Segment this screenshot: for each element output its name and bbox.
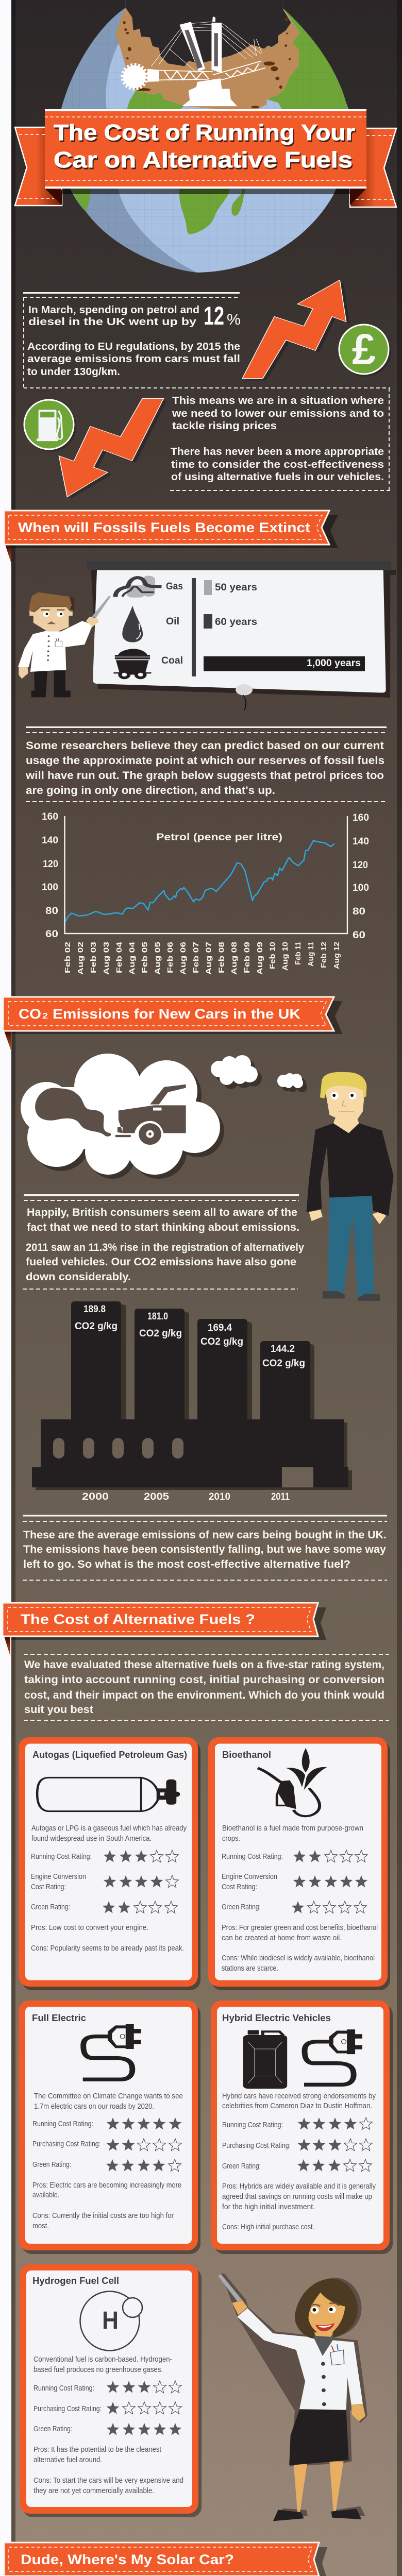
x axis date labels: Feb 03 xyxy=(89,942,98,973)
description: celebrities from Cameron Diaz to Dustin Hoffman. xyxy=(222,2102,372,2110)
year labels: 2011 xyxy=(271,1492,290,1502)
description: The Committee on Climate Change wants to see xyxy=(34,2092,183,2100)
icon: jerry can xyxy=(243,2030,287,2089)
text: British consumers: down considerably. xyxy=(26,1271,131,1283)
pros and cons: agreed that savings on running costs will make up xyxy=(222,2193,372,2201)
bar: gas 50 years: 50 years xyxy=(215,582,257,593)
icon: plug xyxy=(304,2029,362,2084)
pros and cons: alternative fuel around. xyxy=(34,2456,102,2464)
bar labels: gas, oil, coal xyxy=(161,581,183,666)
rating: green 4 of 5 xyxy=(32,2159,181,2172)
pros and cons: Pros: It has the potential to be the cleanest xyxy=(34,2446,161,2454)
value: 2000 xyxy=(75,1304,118,1332)
icon: gas pipes xyxy=(115,575,161,598)
pros and cons: Cons: To start the cars will be very expensive and xyxy=(34,2477,183,2485)
section banner: solar car: Dude, Where's My Solar Car? xyxy=(21,2552,234,2567)
year labels: 2005 xyxy=(144,1492,169,1502)
icon: car exhaust xyxy=(35,1084,186,1145)
text: five-star rating intro: suit you best xyxy=(24,1704,93,1716)
left axis labels: 120 xyxy=(43,859,58,870)
rating: running cost 4 of 5 xyxy=(222,2117,372,2130)
text: five-star rating intro xyxy=(24,1659,384,1716)
x axis date labels: Aug 11 xyxy=(307,942,315,967)
title: The Cost of Running Your xyxy=(54,120,355,145)
text: researchers predict xyxy=(25,740,384,796)
rating: running cost 3 of 5: Running Cost Rating: xyxy=(31,1853,92,1861)
pros and cons: stations are scarce. xyxy=(222,1964,278,1973)
intro text: spending up 12%: diesel in the UK went up by xyxy=(28,316,197,328)
panel: bioethanol card xyxy=(208,1737,390,1990)
text: five-star rating intro: taking into account running cost, initial purchasing or conversion xyxy=(24,1674,384,1686)
right axis labels: 140 xyxy=(353,836,369,847)
value: 2010: 169.4 xyxy=(208,1323,232,1333)
character: male scientist with pointer xyxy=(18,592,111,697)
left axis labels: 100 xyxy=(42,882,58,893)
value: 2005: CO2 g/kg xyxy=(139,1328,182,1339)
card title: Hybrid Electric Vehicles xyxy=(222,2013,331,2023)
pros and cons xyxy=(32,2181,181,2230)
description: Autogas or LPG is a gaseous fuel which has already xyxy=(31,1824,187,1833)
intro text: spending up 12%: 12 xyxy=(204,301,224,330)
text: average emissions: The emissions have been consistently falling, but we have some way xyxy=(23,1544,386,1555)
rating: purchasing cost 1 of 5: Purchasing Cost Rating: xyxy=(34,2405,102,2413)
value: 2011 xyxy=(262,1344,305,1369)
text: British consumers xyxy=(26,1207,304,1283)
text: British consumers: fueled vehicles. Our CO2 emissions have also gone xyxy=(26,1256,296,1268)
x axis date labels: Feb 02 xyxy=(63,942,72,973)
text: British consumers: fact that we need to start thinking about emissions. xyxy=(27,1222,299,1233)
text: researchers predict: usage the approximate point at which our reserves of fossil fuels xyxy=(26,755,384,767)
pros and cons xyxy=(34,2446,183,2495)
hero illustration: globe with excavator xyxy=(61,0,348,273)
x axis date labels: Feb 06 xyxy=(166,942,175,973)
rating: running cost 5 of 5 xyxy=(32,2117,181,2130)
icon: plug xyxy=(83,2024,141,2079)
right axis labels: 160 xyxy=(353,812,369,823)
line chart: petrol pence per litre xyxy=(42,811,369,975)
section banner: CO2 emissions xyxy=(3,997,342,1050)
rating: green 2 of 5: Green Rating: xyxy=(31,1903,70,1911)
factory windows and door xyxy=(53,1438,313,1487)
rating: green 1 of 5 xyxy=(222,1901,366,1913)
pros and cons: they are not yet commercially available. xyxy=(34,2487,154,2495)
pros and cons: can be created at home from waste oil. xyxy=(222,1934,342,1942)
x axis date labels: Aug 03 xyxy=(102,942,111,975)
factory silhouette xyxy=(32,1301,348,1487)
panel: hybrid electric card xyxy=(211,2001,393,2254)
left axis labels: 140 xyxy=(42,835,58,846)
x axis date labels: Feb 12 xyxy=(320,942,328,968)
description xyxy=(34,2092,183,2111)
description xyxy=(222,1824,363,1843)
description: Hybrid cars have received strong endorsements by xyxy=(222,2092,376,2100)
rating: running cost 4 of 5: Running Cost Rating: xyxy=(222,2121,283,2129)
intro text: EU regulations: According to EU regulations, by 2015 the xyxy=(27,341,240,352)
rating: green 2 of 5 xyxy=(31,1901,177,1913)
text: researchers predict: are going in only one direction, and that's up. xyxy=(26,785,275,796)
rating: green 5 of 5: Green Rating: xyxy=(34,2425,72,2433)
icon: hydrogen atom xyxy=(80,2292,142,2350)
icon: pound coin xyxy=(339,325,391,377)
intro text: EU regulations: average emissions from cars must fall xyxy=(27,353,240,365)
bar: oil 60 years xyxy=(204,614,257,629)
rating: engine conversion 4 of 5: Cost Rating: xyxy=(31,1883,66,1891)
description xyxy=(222,2092,376,2110)
icon: fuel nozzle and corn xyxy=(258,1748,327,1816)
description xyxy=(31,1824,187,1843)
intro text: EU regulations xyxy=(27,341,240,378)
value: 2010 xyxy=(200,1323,243,1347)
pros and cons: most. xyxy=(32,2222,49,2230)
text: average emissions: These are the average emissions of new cars being bought in the UK. xyxy=(23,1529,387,1541)
card title: Full Electric xyxy=(32,2013,86,2023)
x axis date labels: Aug 04 xyxy=(128,941,137,975)
description: 1.7m electric cars on our roads by 2020. xyxy=(34,2103,154,2111)
right axis labels xyxy=(353,812,369,941)
rating: purchasing cost 3 of 5: Purchasing Cost Rating: xyxy=(222,2142,291,2150)
card title: Autogas (Liquefied Petroleum Gas) xyxy=(32,1750,187,1760)
rating: running cost 2 of 5 xyxy=(222,1850,367,1862)
year labels: 2010 xyxy=(209,1492,230,1502)
description: Conventional fuel is carbon-based. Hydrogen- xyxy=(34,2355,172,2364)
text: average emissions xyxy=(23,1529,387,1570)
rating: purchasing cost 2 of 5: Purchasing Cost Rating: xyxy=(32,2140,100,2148)
x axis date labels: Aug 07 xyxy=(204,942,213,975)
rating: running cost 3 of 5 xyxy=(34,2381,181,2393)
x axis date labels: Aug 09 xyxy=(256,942,264,975)
intro text: situation: tackle rising prices xyxy=(172,420,277,432)
rating: green 3 of 5: Green Rating: xyxy=(222,2162,261,2171)
rating: green 3 of 5 xyxy=(222,2159,372,2172)
section banner: fossil fuels xyxy=(4,511,338,564)
left axis labels: 60 xyxy=(45,929,58,940)
bar labels: gas, oil, coal: Gas xyxy=(166,581,183,592)
x axis date labels: Aug 12 xyxy=(332,942,341,969)
x axis date labels xyxy=(63,941,341,975)
x axis date labels: Feb 11 xyxy=(294,942,303,965)
icon: fuel pump xyxy=(24,400,76,452)
pros and cons xyxy=(31,1924,184,1953)
text: researchers predict: will have run out. The graph below suggests that petrol prices too xyxy=(25,770,384,782)
intro text: situation: of using alternative fuels in our vehicles. xyxy=(171,471,384,483)
right axis labels: 120 xyxy=(353,860,368,871)
x axis date labels: Aug 06 xyxy=(179,942,188,975)
icon: oil drop xyxy=(122,606,143,642)
excavator xyxy=(147,16,265,106)
icon: hydrogen atom: H xyxy=(102,2307,119,2334)
pros and cons: Pros: Hybrids are widely available and it is generally xyxy=(222,2182,376,2191)
bar: coal 1,000 years xyxy=(204,656,365,671)
bar chart: factory chimneys CO2 g/km xyxy=(32,1301,352,1502)
character: female scientist with pointer xyxy=(218,2273,367,2521)
title xyxy=(54,120,355,173)
rating: engine conversion 4 of 5 xyxy=(31,1873,178,1891)
intro text: situation: we need to lower our emissions and to xyxy=(172,408,384,419)
rating: engine conversion 4 of 5: Engine Conversion xyxy=(31,1873,86,1881)
character: blond man in black jumper xyxy=(307,1072,394,1301)
title: Car on Alternative Fuels xyxy=(54,147,353,173)
x axis date labels: Feb 04 xyxy=(115,941,124,973)
value: 2011: CO2 g/kg xyxy=(262,1358,305,1369)
x axis date labels: Feb 09 xyxy=(243,942,252,973)
rating: running cost 3 of 5 xyxy=(31,1850,178,1862)
section banner: cost of alternative fuels xyxy=(3,1603,326,1656)
pros and cons: available. xyxy=(32,2191,59,2199)
rating: running cost 5 of 5: Running Cost Rating: xyxy=(32,2120,93,2128)
value: 2005 xyxy=(139,1311,182,1339)
section banner: solar car xyxy=(4,2543,327,2576)
description: based fuel produces no greenhouse gases. xyxy=(34,2366,163,2374)
rating: engine conversion 5 of 5 xyxy=(222,1873,367,1891)
rating: running cost 3 of 5: Running Cost Rating: xyxy=(34,2384,94,2393)
rating: purchasing cost 2 of 5 xyxy=(32,2139,181,2151)
card title: Bioethanol xyxy=(222,1750,271,1760)
price line xyxy=(65,841,334,922)
value: 2010: CO2 g/kg xyxy=(200,1336,243,1347)
bucket wheel xyxy=(122,64,147,89)
rating: engine conversion 5 of 5: Engine Conversion xyxy=(222,1873,277,1881)
left axis labels xyxy=(42,811,58,940)
pros and cons: Cons: Currently the initial costs are too high for xyxy=(32,2212,174,2220)
section banner: CO2 emissions: 2 xyxy=(42,1012,48,1021)
rating: green 5 of 5 xyxy=(34,2423,181,2435)
pros and cons xyxy=(222,2182,376,2231)
value: 2000: CO2 g/kg xyxy=(75,1321,118,1332)
pros and cons: Pros: Electric cars are becoming increasingly more xyxy=(32,2181,181,2190)
x axis date labels: Feb 08 xyxy=(217,942,226,973)
intro text: spending up 12%: In March, spending on petrol and xyxy=(28,304,199,316)
chart title: Petrol (pence per litre) xyxy=(156,832,282,843)
year labels xyxy=(82,1492,290,1502)
text: researchers predict: Some researchers believe they can predict based on our current xyxy=(26,740,384,752)
projector screen chart: fossil fuel years left xyxy=(87,561,396,710)
bar: gas 50 years xyxy=(204,580,257,595)
rating: running cost 2 of 5: Running Cost Rating: xyxy=(222,1853,283,1861)
x axis date labels: Feb 10 xyxy=(268,942,277,969)
bar labels: gas, oil, coal: Coal xyxy=(161,655,183,666)
section banner: cost of alternative fuels: The Cost of Alternative Fuels ? xyxy=(21,1612,255,1627)
section banner: fossil fuels: When will Fossils Fuels Become Extinct xyxy=(18,520,310,535)
icon: gas cylinder xyxy=(37,1777,180,1811)
description xyxy=(34,2355,172,2374)
rating: green 4 of 5: Green Rating: xyxy=(32,2161,71,2169)
pros and cons: Cons: While biodiesel is widely available, bioethanol xyxy=(222,1954,375,1962)
thought clouds with exhaust car xyxy=(21,1054,307,1179)
value: 2005: 181.0 xyxy=(147,1311,168,1322)
description: crops. xyxy=(222,1835,240,1843)
intro text: EU regulations: to under 130g/km. xyxy=(27,366,120,378)
arrow: rising prices xyxy=(242,280,350,381)
factory shadow xyxy=(36,1304,352,1490)
right axis labels: 60 xyxy=(353,930,365,941)
x axis date labels: Aug 02 xyxy=(76,942,85,975)
value: 2000: 189.8 xyxy=(83,1304,106,1315)
ribbon right tail xyxy=(350,128,396,207)
right axis labels: 100 xyxy=(353,883,369,893)
rating: green 1 of 5: Green Rating: xyxy=(222,1903,261,1911)
pros and cons: Cons: Popularity seems to be already past its peak. xyxy=(31,1944,184,1953)
ribbon left tail xyxy=(15,127,62,206)
text: five-star rating intro: cost, and their impact on the environment. Which do you think would xyxy=(24,1689,384,1701)
intro text: situation: This means we are in a situation where xyxy=(172,395,384,406)
rating: purchasing cost 3 of 5 xyxy=(222,2139,372,2151)
pros and cons: Cons: High initial purchase cost. xyxy=(222,2223,314,2231)
section banner: CO2 emissions: Emissions for New Cars in the UK xyxy=(53,1006,301,1022)
icon: coal cart xyxy=(113,649,152,679)
section banner: CO2 emissions: CO xyxy=(19,1006,41,1022)
text: average emissions: left to go. So what is the most cost-effective alternative fuel? xyxy=(23,1558,350,1570)
intro dashed frame xyxy=(23,292,390,490)
rating: engine conversion 5 of 5: Cost Rating: xyxy=(222,1883,257,1891)
pros and cons: Pros: Low cost to convert your engine. xyxy=(31,1924,148,1932)
arrow: lowering emissions xyxy=(59,398,167,499)
text: five-star rating intro: We have evaluated these alternative fuels on a five-star rating system, xyxy=(24,1659,384,1671)
intro text: spending up 12% xyxy=(28,301,241,330)
panel: autogas card xyxy=(19,1737,200,1990)
description: Bioethanol is a fuel made from purpose-grown xyxy=(222,1824,363,1833)
bar: coal 1,000 years: 1,000 years xyxy=(307,658,361,669)
bar: oil 60 years: 60 years xyxy=(215,617,257,628)
x axis date labels: Aug 05 xyxy=(154,942,162,975)
intro text: spending up 12%: % xyxy=(227,311,241,328)
panel: full electric card xyxy=(19,2001,200,2254)
description: found widespread use in South America. xyxy=(31,1835,152,1843)
bar labels: gas, oil, coal: Oil xyxy=(166,616,179,627)
rating: purchasing cost 1 of 5 xyxy=(34,2402,181,2414)
text: British consumers: Happily, British consumers seem all to aware of the xyxy=(27,1207,297,1218)
x axis date labels: Aug 10 xyxy=(281,942,290,971)
title ribbon xyxy=(15,109,396,207)
panel: hydrogen fuel cell card xyxy=(20,2264,202,2517)
x axis date labels: Feb 07 xyxy=(192,942,200,973)
value: 2011: 144.2 xyxy=(271,1344,295,1354)
pros and cons: for the high initial investment. xyxy=(222,2203,315,2211)
x axis date labels: Aug 08 xyxy=(230,942,239,975)
x axis date labels: Feb 05 xyxy=(140,942,149,973)
card title: Hydrogen Fuel Cell xyxy=(32,2276,119,2286)
icon: pound coin: £ xyxy=(352,325,376,374)
year labels: 2000 xyxy=(82,1492,109,1502)
intro text: situation xyxy=(171,395,384,483)
left axis labels: 80 xyxy=(45,906,58,917)
pros and cons: Pros: For greater green and cost benefits, bioethanol xyxy=(222,1924,378,1932)
intro text: situation: There has never been a more appropriate xyxy=(171,446,384,457)
text: British consumers: 2011 saw an 11.3% rise in the registration of alternatively xyxy=(26,1242,304,1253)
left axis labels: 160 xyxy=(42,811,58,822)
intro text: situation: time to consider the cost-effectiveness xyxy=(171,459,384,470)
right axis labels: 80 xyxy=(353,906,365,917)
pros and cons xyxy=(222,1924,378,1973)
